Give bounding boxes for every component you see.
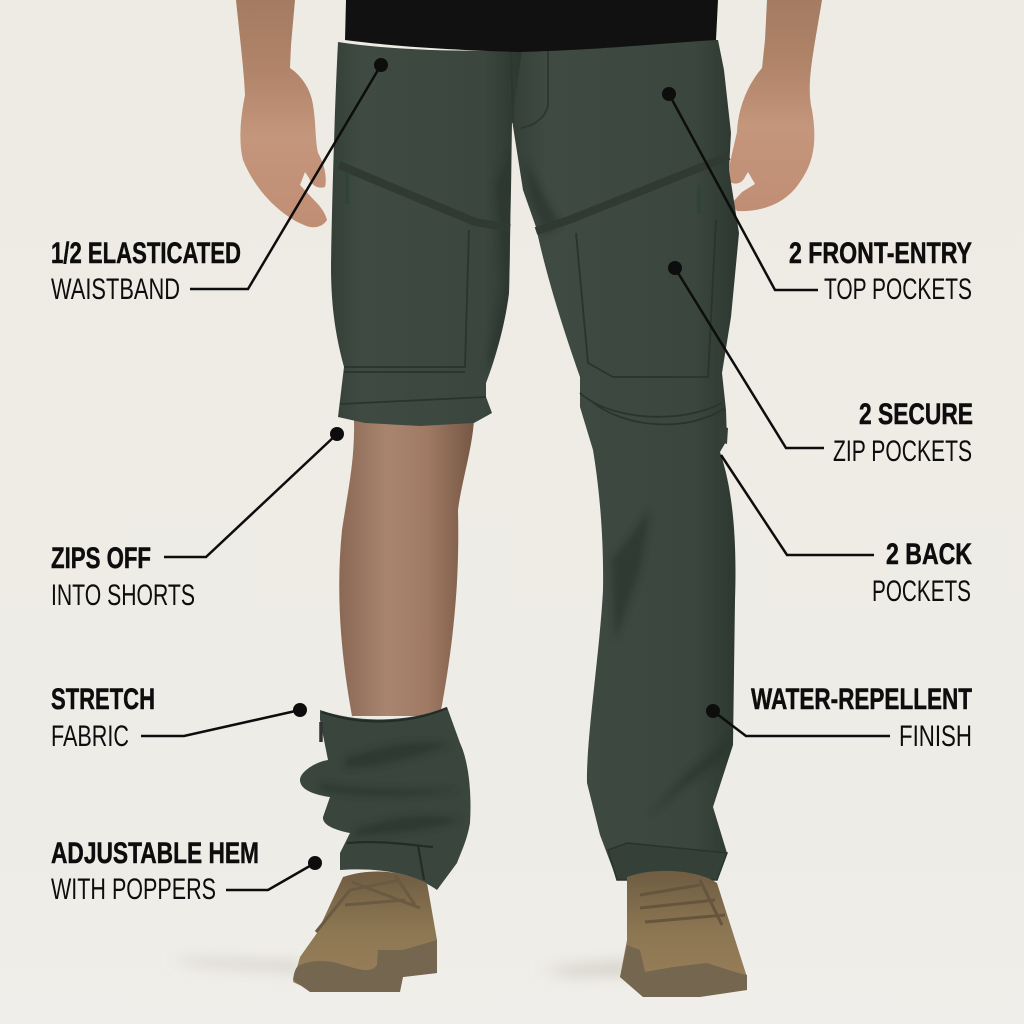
right pocket stitching and zip-off seam — [576, 220, 725, 424]
right leg trousers — [512, 40, 739, 880]
left zip puller — [345, 172, 349, 204]
bare left lower leg — [339, 420, 474, 716]
callout: 2 back pockets: POCKETS — [872, 575, 971, 608]
callout: 1/2 elasticated waistband — [51, 58, 388, 306]
hem folds — [320, 742, 460, 836]
callout: 2 secure zip pockets: 2 SECURE — [859, 398, 973, 431]
callout: 2 front-entry top pockets — [662, 87, 972, 306]
callout: adjustable hem with poppers — [51, 837, 322, 906]
right arm and hand — [728, 0, 822, 211]
left boot — [293, 871, 437, 990]
callout: 1/2 elasticated waistband: 1/2 ELASTICATED — [51, 237, 241, 270]
callout: stretch fabric: STRETCH — [51, 683, 155, 716]
left boot sole — [293, 940, 437, 992]
right zip puller — [697, 185, 701, 214]
fly and waist detail — [511, 50, 548, 128]
callout: zips off into shorts: ZIPS OFF — [51, 542, 151, 575]
right zip pocket — [536, 156, 729, 231]
callout: 2 back pockets: 2 BACK — [886, 538, 972, 571]
trouser fold shading — [492, 160, 710, 795]
right cuff — [608, 843, 727, 880]
callout: zips off into shorts: INTO SHORTS — [51, 579, 195, 612]
left zip pocket — [339, 165, 510, 228]
callout: water-repellent finish — [706, 683, 972, 753]
callout: 2 front-entry top pockets: 2 FRONT-ENTRY — [789, 237, 972, 270]
back pocket flap — [718, 425, 728, 444]
hem zip puller — [319, 722, 323, 742]
product photo: man wearing zip-off trousers — [236, 0, 822, 997]
left pocket stitching and zip-off seam — [340, 230, 486, 404]
rolled up trouser hem — [300, 707, 471, 890]
left leg shorts — [331, 42, 522, 426]
callout: 1/2 elasticated waistband: WAISTBAND — [51, 273, 180, 306]
callout: stretch fabric — [51, 683, 307, 753]
callout: adjustable hem with poppers: ADJUSTABLE HEM — [51, 837, 259, 870]
floor shadows — [170, 958, 630, 976]
callout: stretch fabric: FABRIC — [51, 720, 129, 753]
black shirt — [345, 0, 718, 52]
callout: 2 secure zip pockets — [668, 261, 973, 468]
right boot sole — [620, 945, 747, 997]
left boot laces — [316, 875, 420, 932]
callout: adjustable hem with poppers: WITH POPPERS — [51, 873, 216, 906]
right boot — [620, 871, 747, 997]
callout: water-repellent finish: FINISH — [899, 720, 972, 753]
left arm and hand — [236, 0, 327, 227]
hem cuff and top edge — [322, 708, 447, 880]
callout: zips off into shorts — [51, 427, 344, 612]
right boot laces — [640, 880, 725, 925]
callout: 2 back pockets — [721, 455, 972, 608]
